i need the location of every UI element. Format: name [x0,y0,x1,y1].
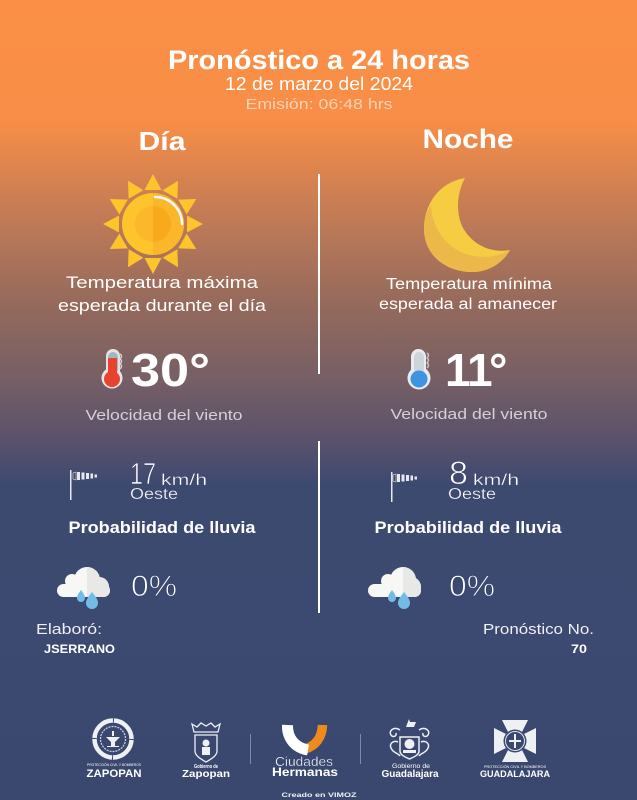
heading: night: Noche [422,124,514,154]
center divider: upper [318,174,320,374]
heading: day: Día [138,126,186,156]
text: maximum temperature: Temperatura máxima [66,273,259,292]
logo: Ciudades Hermanas: Ciudades [275,755,333,769]
logo: Gobierno de Zapopan: Zapopan [182,768,230,780]
label: wind speed night: Velocidad del viento [390,406,548,423]
value: 30 degrees: 30° [131,344,210,396]
text: minimum temperature [379,276,557,313]
divider [360,734,361,764]
icon: rain cloud day [57,567,110,609]
logo: Protección Civil y Bomberos Guadalajara: GUADALAJARA [480,769,551,779]
logo: Protección Civil y Bomberos Zapopan: ZAPOPAN [86,768,142,780]
logo: Ciudades Hermanas [272,725,338,779]
wind value night: km/h [473,472,519,489]
heading: rain probability day: Probabilidad de lluvia [68,519,256,537]
label: wind speed day: Velocidad del viento [86,407,242,424]
icon: wind sock day [70,470,97,500]
value: 11 degrees: 11° [445,344,507,396]
wind value day [130,456,207,503]
logo: Ciudades Hermanas: Hermanas [272,765,338,779]
logo: Protección Civil y Bomberos Zapopan [86,720,142,780]
icon: rain cloud night [368,567,421,609]
emission time: Emisión: 06:48 hrs [246,97,392,113]
credit: author [36,621,115,656]
text: maximum temperature [58,273,267,315]
heading: rain probability night: Probabilidad de lluvia [374,519,562,537]
credit: author: JSERRANO [44,644,115,656]
value: rain night: 0% [449,570,495,603]
logo: Protección Civil y Bomberos Guadalajara: PROTECCIÓN CIVIL Y BOMBEROS [484,764,547,769]
divider [250,734,251,764]
wind value night: 8 [449,455,468,491]
icon: sun [103,174,203,274]
title: Pronóstico a 24 horas [168,45,470,75]
wind value day: 17 [130,456,156,491]
logo: Gobierno de Guadalajara [382,719,439,780]
value: rain day: 0% [131,570,177,603]
center divider: lower [318,441,320,613]
text: minimum temperature: Temperatura mínima [386,276,552,293]
icon: moon [424,178,510,272]
logo: Gobierno de Zapopan [182,723,230,780]
logo: Protección Civil y Bomberos Guadalajara [480,720,551,779]
logo: Gobierno de Guadalajara: Gobierno de [392,763,430,770]
logo: Gobierno de Guadalajara: Guadalajara [382,769,439,780]
credit: author: Elaboró: [36,621,102,638]
credit: forecast number [483,621,594,656]
credit: created in VIMOZ: Creado en VIMOZ [282,792,357,799]
wind direction night: Oeste [448,486,496,503]
icon: wind sock night [391,472,417,502]
title [168,45,470,94]
logo: Gobierno de Zapopan: Gobierno de [194,764,218,770]
icon: cold thermometer [408,349,430,390]
credit: forecast number: Pronóstico No. [483,621,594,638]
wind direction day: Oeste [130,486,178,503]
wind value day: km/h [161,472,207,489]
wind value night [448,455,519,503]
date: 12 de marzo del 2024 [225,74,413,94]
credit: forecast number: 70 [571,644,587,656]
text: minimum temperature: esperada al amanecer [379,296,557,313]
logo: Protección Civil y Bomberos Zapopan: PROTECCIÓN CIVIL Y BOMBEROS [87,762,141,767]
text: maximum temperature: esperada durante el día [58,296,267,315]
icon: hot thermometer [102,349,122,388]
